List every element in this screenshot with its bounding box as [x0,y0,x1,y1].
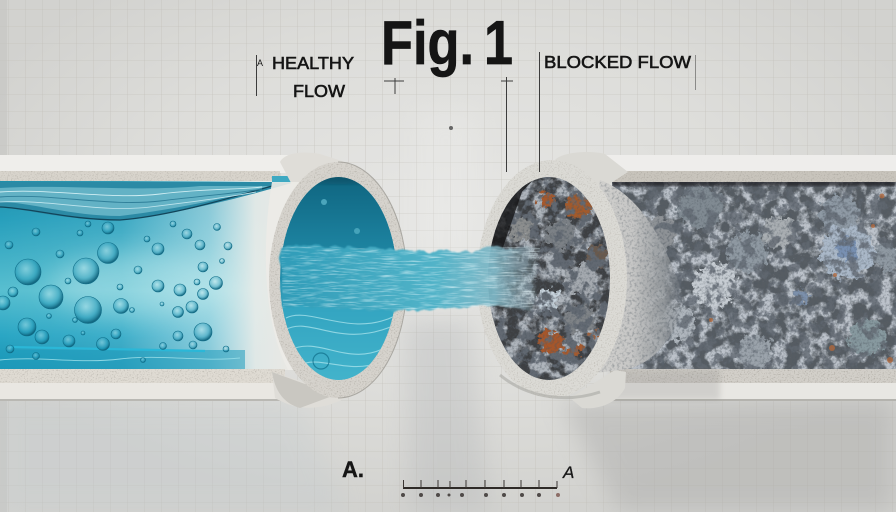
section marker A: A. [342,457,364,482]
label: healthy flow: HEALTHY [272,53,354,73]
pipe end ring [269,162,407,398]
pipe upper wall [0,155,290,182]
pipe: blocked flow (right) [477,152,896,408]
water surface waves [0,176,298,220]
clogged debris inside pipe [612,180,896,371]
water body with gradient [0,181,290,370]
blocked pipe end ring [477,160,627,398]
label: blocked flow: BLOCKED FLOW [544,52,691,72]
pipe: healthy flow (left) [0,153,407,408]
pipe interior water [280,172,398,381]
label: healthy flow [257,53,354,101]
label: healthy flow: FLOW [293,81,345,101]
label: healthy flow: A [257,58,263,68]
leader lines and crosshair marks [256,52,696,172]
debris visible through pipe opening [487,176,611,382]
lower water band [0,347,245,369]
pipe lower wall [0,369,285,401]
title: Fig. [381,9,474,78]
blocked pipe lower wall [610,369,896,401]
air bubbles [0,221,232,362]
blocked pipe upper wall [600,155,896,182]
blocked pipe end cuff [555,152,685,408]
title: 1 [484,9,513,78]
scale bar [401,480,560,497]
pipe end cuff [266,153,345,408]
water jet between pipes [281,246,540,310]
section marker A right: A [562,463,574,482]
